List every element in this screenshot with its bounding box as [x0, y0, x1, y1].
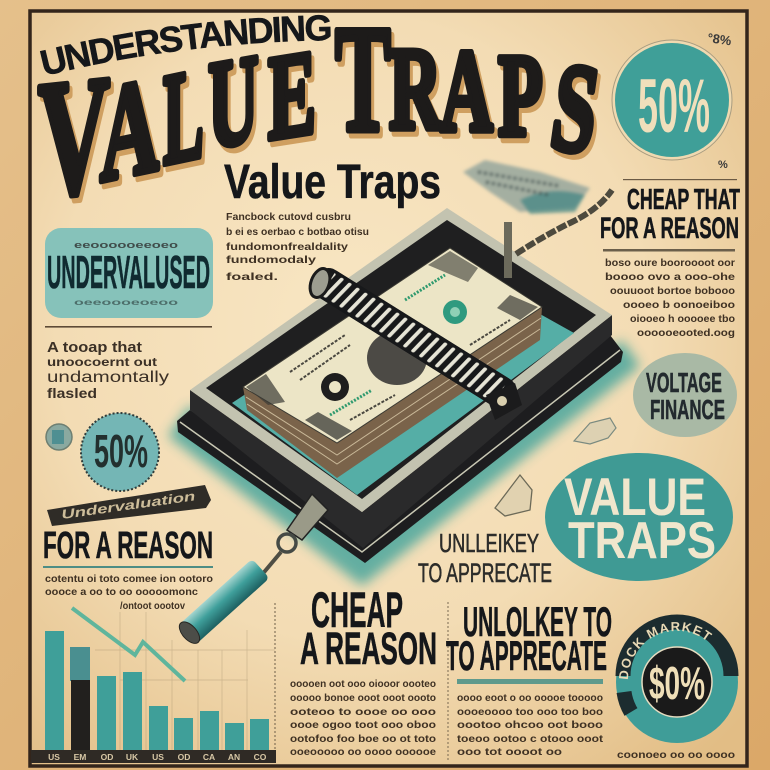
chain link [260, 552, 281, 577]
spring bar [307, 263, 521, 413]
badge: 50% circle left [81, 413, 159, 491]
banner: torn label [47, 485, 211, 526]
bill text lines [290, 320, 510, 420]
block: cheap a reason: oooe ogoo toot ooo oboo [290, 720, 436, 731]
infographic poster: UNLOLKEY TO [463, 598, 612, 645]
block: unlikely to appreciate lower: ooo tot oooot oo [457, 747, 562, 758]
badge: value traps ellipse [545, 453, 733, 581]
block: cheap a reason: ooeooooo oo oooo oooooe [290, 747, 436, 758]
bill face [243, 248, 542, 443]
badge: value traps ellipse: VALUE [564, 468, 706, 527]
sketch: crumpled note [574, 418, 616, 444]
axis labels: CO [254, 752, 267, 762]
banner: torn label: Undervaluation [60, 488, 196, 522]
spring hinge left [306, 266, 334, 300]
text block: left caption: /ontoot oootov [120, 601, 185, 612]
sketch: fish scribble [463, 160, 590, 214]
block: unlikely to appreciate lower: toeoo ootoo c otooo ooot [457, 734, 604, 745]
axis labels: OD [101, 752, 113, 762]
text block: a trap that: flasled [47, 385, 97, 401]
bill ornament corners [246, 251, 538, 440]
axis labels: UK [126, 752, 139, 762]
block: cheap a reason: ooteoo to oooe oo ooo [290, 707, 436, 718]
axis labels [48, 752, 267, 762]
lower mark: % [718, 159, 728, 171]
heading: for a reason: FOR A REASON [43, 525, 213, 567]
frame top [190, 208, 612, 512]
badge: value traps ellipse: TRAPS [568, 512, 716, 570]
text block: a trap that: unoocoernt out [47, 355, 157, 369]
chain ring [278, 534, 296, 552]
small heading: UNDERSTANDING: UNDERSTANDING [40, 14, 331, 74]
text block: cheap that for a reason: boso oure booroooot oor [605, 258, 735, 269]
frame wall [190, 315, 612, 548]
axis strip [31, 750, 276, 763]
teal shadow [168, 340, 640, 586]
infographic poster: UNDERVALUSED [47, 246, 210, 298]
post [504, 222, 512, 278]
clasp [287, 494, 328, 540]
text block: unlikely to appreciate: TO APPRECATE [418, 558, 552, 588]
panel: undervalued [45, 228, 213, 328]
badge: vintage finance [633, 353, 737, 437]
divider [447, 602, 449, 760]
axis labels: AN [228, 752, 240, 762]
text block: a trap that: undamontally [47, 369, 169, 386]
text block: left caption: cotentu oi toto comee ion ootoro [45, 574, 213, 585]
badge: market seal: $0% [649, 657, 705, 709]
portrait [367, 331, 427, 385]
dotted axis [274, 603, 276, 750]
block: cheap a reason: ooooo bonoe ooot ooot oooto [290, 693, 436, 704]
illustration: mousetrap with cash [168, 190, 640, 647]
main title: VALUE TRAPS: A [100, 48, 159, 211]
main title: VALUE TRAPS: P [498, 32, 543, 161]
badge: 50% circle left: 50% [94, 425, 148, 477]
teal floor [232, 262, 574, 495]
block: unlikely to appreciate lower: oootoo ohcoo oot booo [457, 720, 603, 731]
inner well [206, 220, 596, 499]
teal handle [176, 559, 270, 647]
chain top right [516, 190, 612, 254]
block: cheap a reason [290, 582, 437, 758]
text block: cheap that for a reason: oiooeo h ooooee tbo [630, 314, 735, 325]
badge caption: coonoeo oo oo oooo [617, 750, 735, 761]
block: unlikely to appreciate lower [446, 598, 612, 758]
main title: VALUE TRAPS: V [38, 41, 110, 232]
bars [45, 631, 269, 750]
corner mark: °8% [707, 30, 733, 48]
block: unlikely to appreciate lower: oooo eoot o oo ooooe tooooo [457, 693, 603, 704]
badge: 50% teal circle [612, 40, 732, 160]
text block: left caption: oooce a oo to oo ooooomonc [45, 587, 198, 598]
text block: a trap that [47, 339, 169, 401]
text block: unlikely to appreciate: UNLLEIKEY [439, 528, 539, 558]
chart: declining bars [31, 603, 276, 763]
text block: a trap that: A tooap that [47, 339, 142, 356]
axis labels: US [48, 752, 60, 762]
grid lines [95, 612, 275, 750]
block: cheap a reason: CHEAP [311, 582, 403, 638]
base highlight [180, 350, 620, 552]
main title: VALUE TRAPS: A [440, 27, 493, 156]
serial lines [330, 275, 445, 415]
text block: cheap that for a reason: oooooeooted.oog [637, 328, 735, 339]
axis labels: CA [203, 752, 215, 762]
text block: intro paragraph: foaled. [226, 272, 278, 283]
spring hinge right [486, 383, 522, 420]
text block: cheap that for a reason: boooo ovo a ooo-ohe [605, 272, 736, 283]
main title: VALUE TRAPS: U [208, 27, 259, 175]
base plate [177, 335, 623, 563]
panel: undervalued: eeoooooeeoeo [74, 240, 179, 250]
block: unlikely to appreciate lower: oooeoooo too ooo too boo [457, 707, 603, 718]
main title: VALUE TRAPS [38, 0, 607, 232]
axis labels: EM [74, 752, 86, 762]
block: cheap a reason: ooooen oot ooo oiooor oooteo [290, 679, 436, 690]
left seal [321, 373, 349, 401]
text block: intro paragraph: fundomodaly [226, 255, 317, 266]
subtitle: Value Traps: Value Traps [224, 156, 441, 209]
right seal [443, 300, 467, 324]
main title: VALUE TRAPS: E [268, 26, 316, 166]
icon: small medal [46, 424, 72, 450]
badge: market seal: DOCK MARKET [619, 622, 712, 680]
text block: cheap that for a reason: oouuoot bortoe bobooo [610, 286, 735, 297]
text block: intro paragraph [226, 212, 369, 283]
panel: undervalued: oeeoooeoeoo [74, 298, 178, 307]
text block: intro paragraph: fundomonfrealdality [226, 242, 349, 253]
page edges [246, 318, 541, 464]
block: cheap a reason: ootofoo foo boe oo ot toto [290, 734, 436, 745]
badge: market seal [616, 614, 738, 743]
block: unlikely to appreciate lower: TO APPRECATE [446, 632, 607, 679]
trend line [72, 608, 185, 681]
sketch: paper scrap [495, 475, 532, 516]
axis labels: US [152, 752, 164, 762]
text block: left caption [43, 566, 213, 612]
main title: VALUE TRAPS: R [389, 25, 443, 154]
cash stack sides [243, 307, 542, 478]
axis labels: OD [178, 752, 190, 762]
text block: intro paragraph: Fancbock cutovd cusbru [226, 212, 351, 223]
text block: intro paragraph: b ei es oerbao c botbao otisu [226, 227, 369, 238]
text block: cheap that for a reason [600, 179, 740, 339]
main title: VALUE TRAPS: L [163, 41, 204, 193]
main title: VALUE TRAPS: S [544, 36, 607, 180]
block: cheap a reason: A REASON [300, 623, 437, 674]
text block: cheap that for a reason: oooeo b oonoeiboo [623, 300, 735, 311]
text block: unlikely to appreciate [418, 528, 552, 588]
